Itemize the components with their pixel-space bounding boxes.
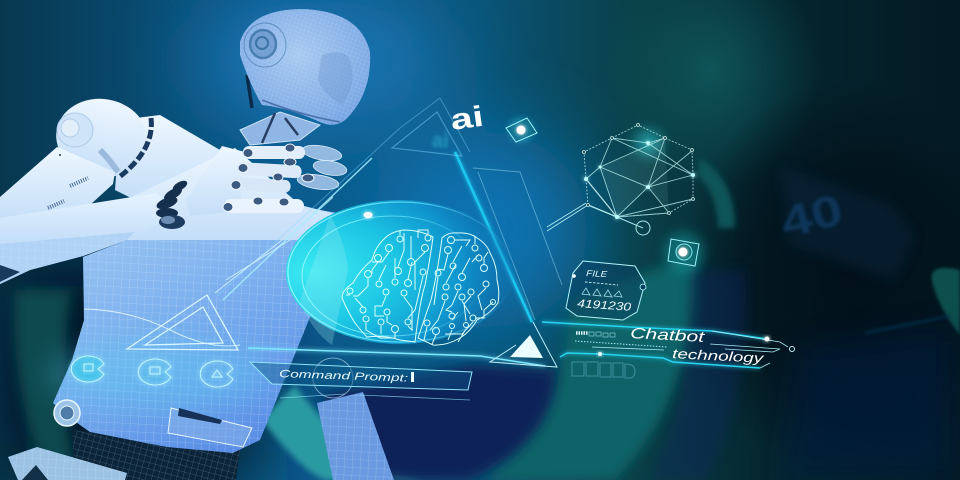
cyan disc bbox=[286, 200, 514, 345]
hud circle square bbox=[138, 359, 171, 385]
robot forearm bbox=[0, 193, 175, 284]
right chevron lines bbox=[473, 168, 562, 320]
main triangle right edge bbox=[455, 152, 532, 322]
command prompt bar bbox=[250, 362, 472, 400]
hud diagonal bbox=[215, 240, 290, 293]
polyhedron shaded face bbox=[600, 138, 669, 217]
chatbot label: Chatbot bbox=[630, 325, 706, 346]
left lobe bbox=[342, 230, 433, 342]
robot hand bbox=[186, 143, 348, 216]
banner tick bbox=[592, 344, 780, 368]
hud circle triangle bbox=[200, 361, 233, 387]
background number: 40 bbox=[776, 185, 848, 248]
background top teal glow bbox=[600, 0, 820, 190]
robot lower mechanics bbox=[8, 430, 240, 480]
robot upper arm bbox=[0, 147, 115, 222]
shoulder ball bbox=[50, 92, 154, 184]
small triangle marker bbox=[490, 322, 557, 367]
file triangles bbox=[582, 288, 622, 297]
polyhedron edges bbox=[584, 125, 693, 217]
polyhedron network bbox=[547, 124, 695, 235]
polyhedron glow bbox=[634, 129, 662, 157]
robot chest and shoulder bbox=[50, 92, 340, 240]
brain circuit icon bbox=[342, 230, 499, 345]
robot torso bbox=[50, 205, 350, 453]
torso cyan glow bbox=[50, 340, 270, 410]
robot leg bbox=[313, 358, 394, 480]
banner dotted line bbox=[575, 341, 667, 347]
banner progress bbox=[576, 331, 588, 335]
banner top line bbox=[542, 322, 767, 339]
polyhedron tail ring bbox=[636, 221, 650, 235]
torso hud icons bbox=[71, 356, 233, 387]
banner bottom line bbox=[560, 353, 760, 368]
banner bottom dot bbox=[598, 352, 602, 356]
icon: upper diamond node bbox=[506, 117, 537, 143]
main triangle left edge bbox=[217, 98, 470, 296]
background faint line bbox=[865, 316, 950, 333]
torso panel bbox=[168, 408, 252, 447]
background navy floor bbox=[780, 330, 950, 480]
prompt cursor bbox=[411, 372, 414, 382]
disc shading over torso bbox=[300, 215, 348, 345]
background inner ring bbox=[262, 385, 420, 480]
ai reflection: ai bbox=[432, 130, 449, 152]
file title: FILE bbox=[586, 268, 608, 279]
main triangle inner bbox=[392, 112, 462, 156]
robot bbox=[0, 9, 394, 480]
background blue column bbox=[650, 270, 746, 480]
hud frame bbox=[127, 98, 562, 366]
technology label: technology bbox=[672, 346, 765, 366]
banner cells bbox=[589, 332, 615, 337]
file panel bbox=[566, 261, 646, 320]
background dark right shade bbox=[680, 80, 960, 480]
robot hip joint bbox=[54, 400, 80, 426]
polyhedron nodes bbox=[584, 141, 695, 219]
chatbot technology banner bbox=[542, 322, 794, 378]
icon: lower square node bbox=[664, 232, 704, 272]
head ear rings bbox=[244, 23, 286, 67]
banner ring bbox=[790, 346, 794, 352]
left traces bbox=[346, 230, 428, 339]
background teal arc right bbox=[697, 158, 735, 228]
banner dot bbox=[764, 336, 770, 342]
ai label: ai bbox=[449, 101, 486, 137]
head face shading bbox=[318, 52, 353, 105]
disc light bbox=[364, 212, 372, 218]
background haze behind number bbox=[780, 165, 915, 280]
polyhedron tail bbox=[547, 203, 643, 231]
banner lower cells bbox=[572, 362, 635, 378]
hud circle square filled bbox=[71, 356, 104, 382]
background teal ring bbox=[480, 255, 695, 480]
bottom edge bbox=[248, 348, 545, 366]
background teal blob bbox=[932, 268, 960, 335]
hand translucent fingertips bbox=[296, 143, 348, 192]
robot head bbox=[240, 9, 370, 125]
background navy core bbox=[320, 365, 555, 480]
robot neck bbox=[240, 75, 320, 145]
banner wire bbox=[712, 331, 788, 347]
command prompt bar: Command Prompt: bbox=[279, 368, 408, 385]
right lobe bbox=[418, 233, 499, 345]
robot wrist bbox=[155, 179, 189, 229]
file number: 4191230 bbox=[577, 298, 632, 314]
main triangle bright left edge bbox=[223, 158, 372, 300]
background left arc bbox=[14, 290, 75, 480]
right traces bbox=[424, 236, 493, 344]
torso outline triangle bbox=[127, 295, 238, 350]
